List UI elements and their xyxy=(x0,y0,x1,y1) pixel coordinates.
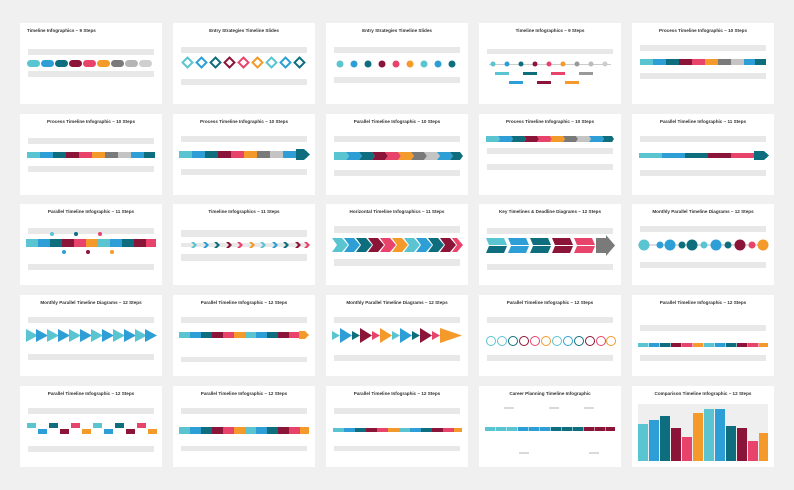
ring circles xyxy=(486,336,616,346)
slide r4c2: parallel 12 arrows: Parallel Timeline Infographic – 12 Steps xyxy=(201,300,288,305)
slide r3c5: monthly circles xyxy=(632,204,774,285)
chevron pills xyxy=(27,60,152,67)
slide r5c3: parallel 12 thin bar xyxy=(326,386,468,467)
slide r2c3: parallel 10 chevrons xyxy=(326,114,468,195)
slide r5c2: parallel 12 arrows xyxy=(173,386,315,467)
slide r3c3: horizontal 11 chevrons xyxy=(326,204,468,285)
slide r3c2: timeline 11 chevrons: Timeline Infographics – 11 Steps xyxy=(208,209,280,214)
small chevrons xyxy=(181,242,310,248)
slide r4c3: monthly arrows xyxy=(326,295,468,376)
bar xyxy=(179,427,309,434)
bars xyxy=(638,409,768,461)
slide r4c1: monthly triangles: Monthly Parallel Timeline Diagrams – 12 Steps xyxy=(40,300,142,305)
slide r5c3: parallel 12 thin bar: Parallel Timeline Infographic – 12 Steps xyxy=(354,391,441,396)
slide r3c3: horizontal 11 chevrons: Horizontal Timeline Infographics – 11 Steps xyxy=(350,209,445,214)
bar xyxy=(333,428,462,432)
bar xyxy=(485,427,615,431)
slide r2c2: process 10 arrows: Process Timeline Infographic – 10 Steps xyxy=(200,119,288,124)
slide r2c1: process 10 steps bar xyxy=(20,114,162,195)
slide r5c2: parallel 12 arrows: Parallel Timeline Infographic – 12 Steps xyxy=(201,391,288,396)
bar xyxy=(27,152,155,158)
slide r5c1: parallel 12 squares: Parallel Timeline Infographic – 12 Steps xyxy=(48,391,135,396)
labels xyxy=(27,423,157,434)
slide r3c5: monthly circles: Monthly Parallel Timeline Diagrams – 12 Steps xyxy=(652,209,754,214)
slide r4c2: parallel 12 arrows xyxy=(173,295,315,376)
arrows xyxy=(639,151,769,160)
slide r2c5: parallel 11 arrows: Parallel Timeline Infographic – 11 Steps xyxy=(660,119,747,124)
slide r3c4: key timelines xyxy=(479,204,621,285)
slide r4c3: monthly arrows: Monthly Parallel Timeline Diagrams – 12 Steps xyxy=(346,300,448,305)
chevrons xyxy=(334,152,463,160)
circles xyxy=(638,240,768,250)
top chevrons xyxy=(486,136,614,142)
slide r3c2: timeline 11 chevrons xyxy=(173,204,315,285)
slide r4c1: monthly triangles xyxy=(20,295,162,376)
slide r3c1: parallel 11 bars: Parallel Timeline Infographic – 11 Steps xyxy=(48,209,135,214)
slide r2c1: process 10 steps bar: Process Timeline Infographic – 10 Steps xyxy=(47,119,135,124)
slide r5c5: comparison bar chart xyxy=(632,386,774,467)
slide r2c4: process 10 chevrons: Process Timeline Infographic – 10 Steps xyxy=(506,119,594,124)
slide r1c5: process timeline bar xyxy=(632,23,774,104)
arrow band xyxy=(179,331,309,339)
slide r1c3: entry strategies circles: Entry Strategies Timeline Slides xyxy=(362,28,432,33)
slide r5c5: comparison bar chart: Comparison Timeline Infographic – 12 Steps xyxy=(655,391,752,396)
dots and labels xyxy=(489,62,611,84)
slide r4c4: outline circles: Parallel Timeline Infographic – 12 Steps xyxy=(507,300,594,305)
slide r2c5: parallel 11 arrows xyxy=(632,114,774,195)
slide r1c1: timeline 9 steps xyxy=(20,23,162,104)
slide r1c1: timeline 9 steps: Timeline Infographics – 9 Steps xyxy=(27,28,96,33)
slide r1c4: timeline 9 steps boxes: Timeline Infographics – 9 Steps xyxy=(516,28,585,33)
circles xyxy=(336,60,456,68)
slide r4c5: parallel 12 bars: Parallel Timeline Infographic – 12 Steps xyxy=(660,300,747,305)
slide r5c4: career planning: Career Planning Timeline Infographic xyxy=(509,391,591,396)
slide r4c5: parallel 12 bars xyxy=(632,295,774,376)
slide r2c4: process 10 chevrons xyxy=(479,114,621,195)
slide r5c4: career planning xyxy=(479,386,621,467)
slide r1c5: process timeline bar: Process Timeline Infographic – 10 Steps xyxy=(659,28,747,33)
triangles xyxy=(26,329,157,342)
slide r3c1: parallel 11 bars xyxy=(20,204,162,285)
big chevrons xyxy=(332,238,463,252)
parallelogram blocks xyxy=(486,235,615,256)
slide r2c3: parallel 10 chevrons: Parallel Timeline Infographic – 10 Steps xyxy=(354,119,441,124)
bars xyxy=(26,232,156,254)
bar xyxy=(638,343,768,347)
slide r1c3: entry strategies circles xyxy=(326,23,468,104)
slide r1c4: timeline 9 steps boxes xyxy=(479,23,621,104)
arrows xyxy=(179,149,310,160)
bar xyxy=(640,59,766,65)
slide r5c1: parallel 12 squares xyxy=(20,386,162,467)
slide r4c4: outline circles xyxy=(479,295,621,376)
slide r1c2: entry strategies diamonds: Entry Strategies Timeline Slides xyxy=(209,28,279,33)
diamonds xyxy=(183,58,304,67)
slide r1c2: entry strategies diamonds xyxy=(173,23,315,104)
slide r3c4: key timelines: Key Timelines & Deadline Diagrams – 12 Steps xyxy=(499,209,601,214)
arrow triangles xyxy=(332,328,462,343)
slide r2c2: process 10 arrows xyxy=(173,114,315,195)
